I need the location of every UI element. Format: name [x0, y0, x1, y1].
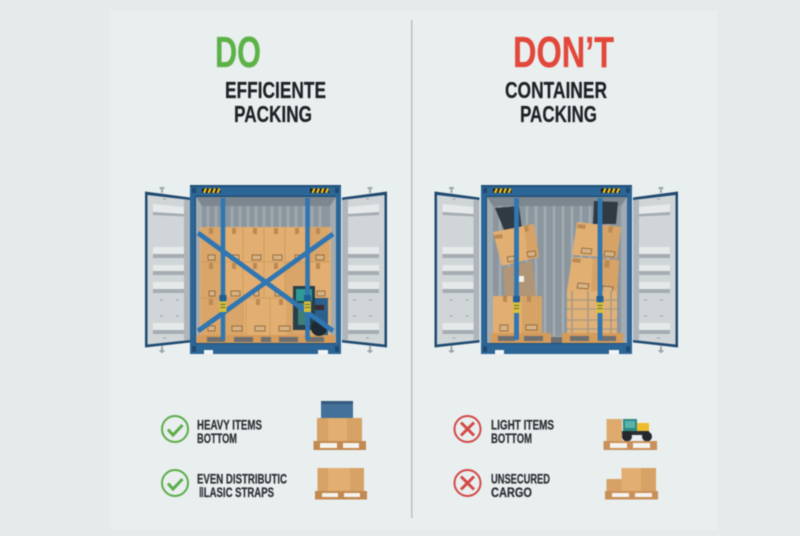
blue straps [516, 198, 600, 340]
icon: pallet with heavy crate [314, 401, 366, 450]
leaning cartons right stack [567, 222, 621, 295]
subtitle: container packing: CONTAINER [505, 77, 607, 103]
center divider [411, 20, 412, 518]
stacked cartons [200, 227, 331, 335]
label [197, 472, 287, 500]
left door [145, 187, 190, 353]
icon: pallet with uneven cartons [605, 468, 658, 500]
icon: cross [454, 416, 480, 442]
gap floor [551, 337, 562, 343]
icon: pallet with forklift [604, 419, 657, 450]
item: light items bottom [454, 416, 657, 450]
subtitle: container packing [505, 77, 607, 127]
label: BOTTOM [491, 431, 532, 446]
dark fallen boxes [495, 201, 618, 232]
left pallet [491, 333, 551, 343]
right pallet [562, 333, 623, 343]
interior wall [196, 197, 336, 343]
subtitle: efficient packing: PACKING [234, 101, 312, 127]
label [197, 418, 262, 446]
container: bad packing [434, 185, 678, 354]
label: CARGO [491, 485, 532, 500]
interior wall [487, 197, 627, 343]
pallet [197, 335, 335, 343]
icon: check [162, 416, 188, 442]
right door [633, 187, 678, 353]
subtitle: container packing: PACKING [520, 101, 597, 127]
icon: cross [454, 470, 480, 496]
slatted crate [567, 291, 617, 333]
subtitle: efficient packing: EFFICIENTE [225, 77, 326, 103]
forklift behind straps [293, 286, 328, 336]
strap buckles [513, 296, 604, 313]
container: good packing [145, 185, 387, 354]
label [491, 418, 554, 446]
right door [342, 187, 387, 353]
heading: DON'T: DON’T [513, 28, 614, 77]
icon: check [162, 470, 188, 496]
label: HEAVY ITEMS [197, 418, 262, 432]
item: unsecured cargo [454, 468, 658, 500]
blue straps [198, 198, 333, 340]
subtitle: efficient packing [225, 77, 326, 127]
label: LIGHT ITEMS [491, 418, 554, 432]
label: EVEN DISTRIBUTIC [197, 472, 287, 486]
label: ‖LASIC STRAPS [199, 485, 274, 500]
label [491, 472, 550, 500]
label: BOTTOM [197, 431, 237, 446]
container frame [481, 185, 632, 354]
icon: pallet with carton [315, 468, 367, 500]
strap buckles [220, 295, 311, 312]
left door [434, 187, 480, 353]
leaning cartons left stack [493, 224, 542, 333]
label: UNSECURED [491, 472, 550, 486]
heading: DO: DO [215, 28, 261, 77]
item: heavy items bottom [162, 401, 366, 450]
background panel [110, 10, 717, 530]
container frame [190, 185, 341, 354]
item: even distribution [162, 468, 367, 500]
